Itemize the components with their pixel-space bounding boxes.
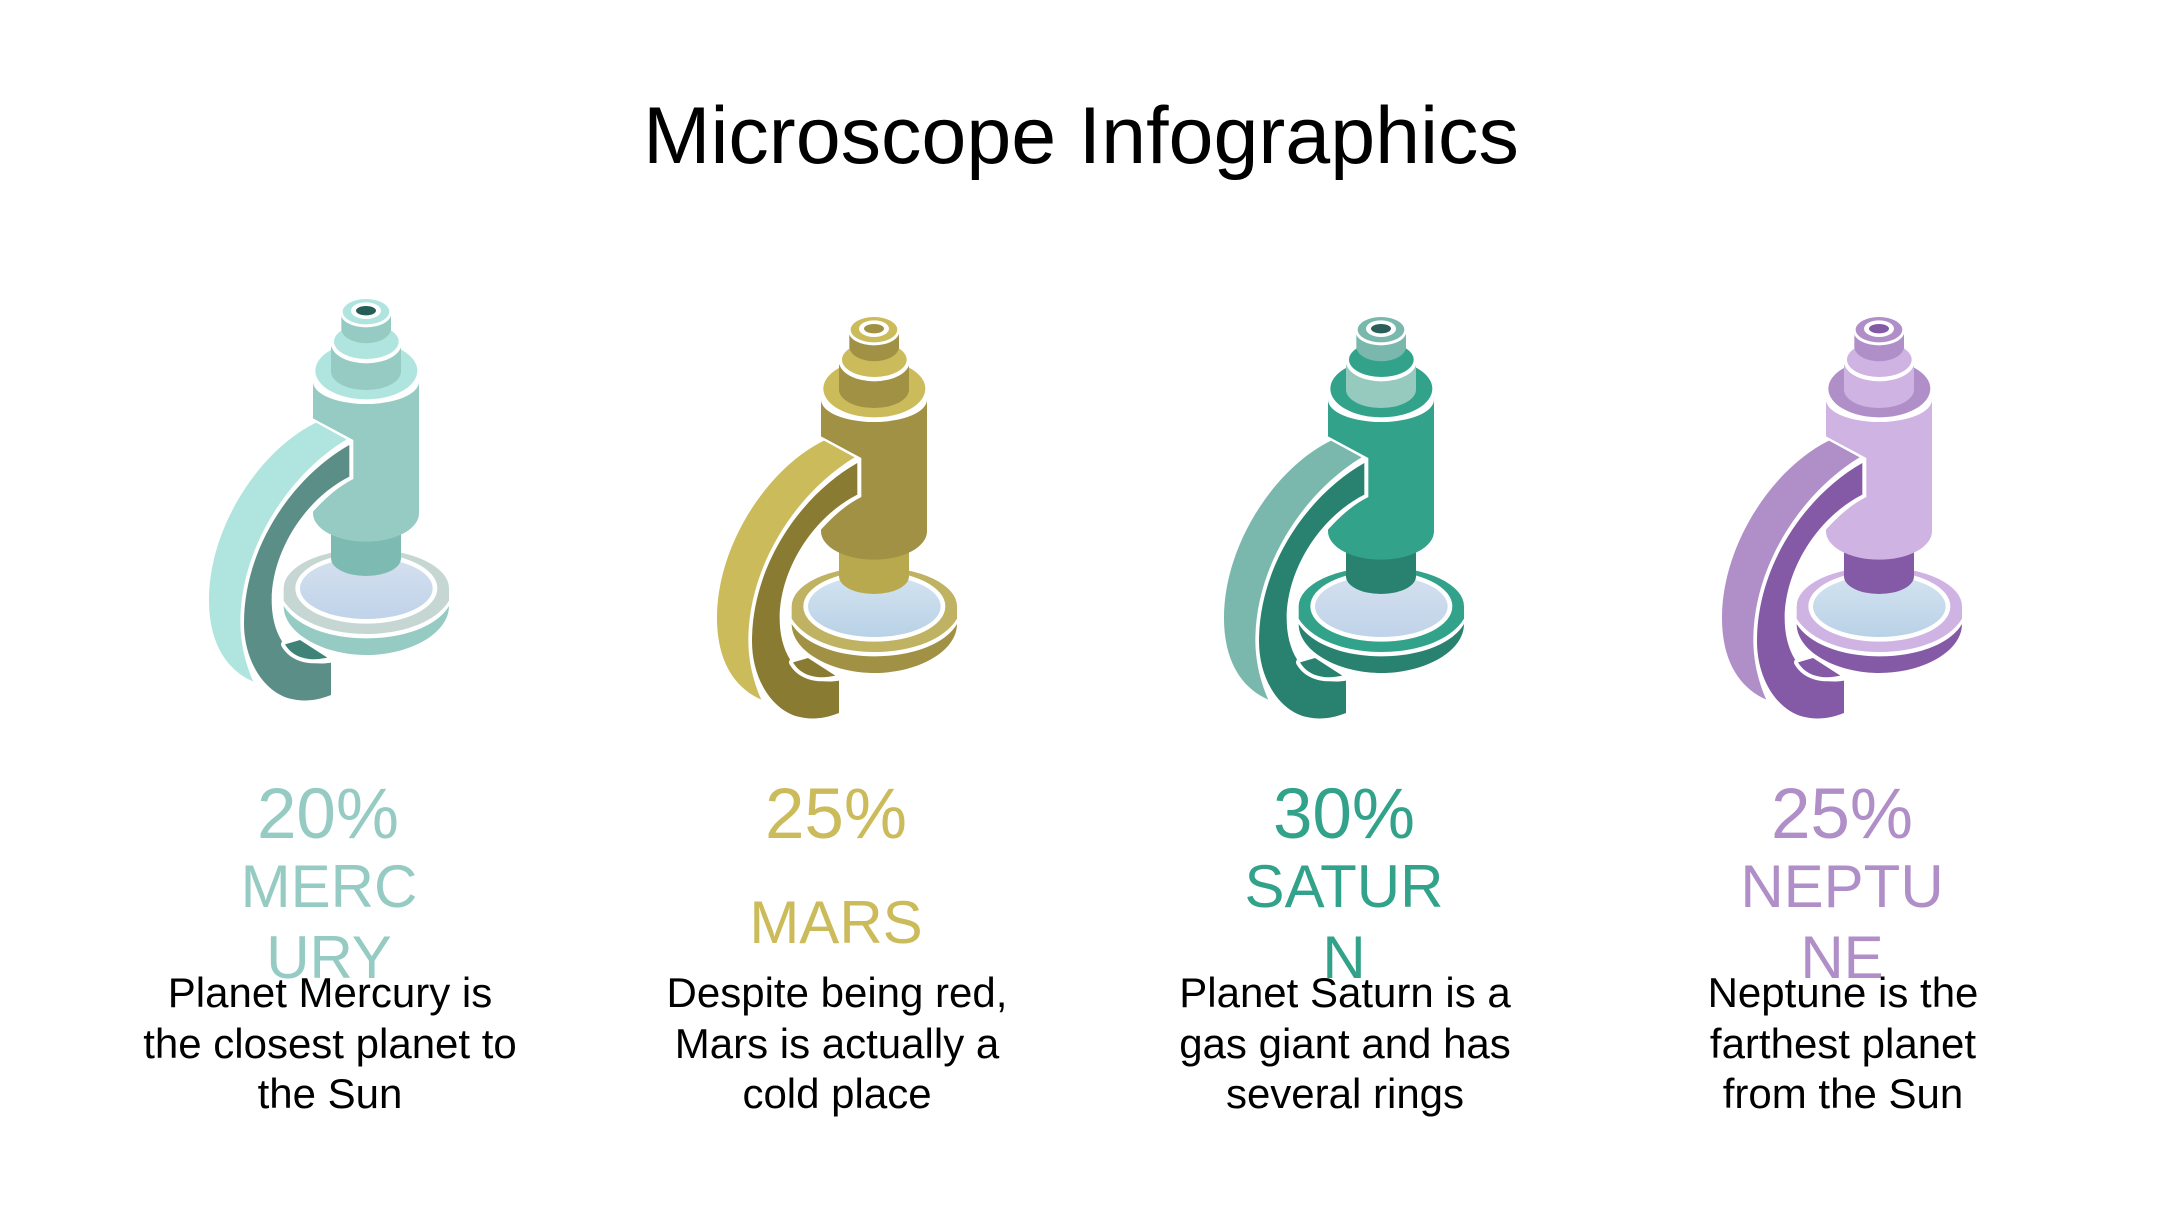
description: Mercury: the Sun xyxy=(258,1070,402,1117)
eyepiece xyxy=(1826,317,1933,422)
base xyxy=(792,567,957,673)
percentage: Neptune: 25% xyxy=(1771,775,1913,854)
microscope: Neptune xyxy=(1722,317,1962,718)
description: Mars: cold place xyxy=(742,1070,932,1117)
description: Mercury: Planet Mercury is xyxy=(168,969,492,1016)
objective xyxy=(839,548,909,594)
planet name: Neptune: NE xyxy=(1800,924,1884,991)
planet name: Mars: MARS xyxy=(749,889,923,956)
description: Neptune: Neptune is the xyxy=(1708,969,1978,1016)
planet name: Mercury: URY xyxy=(266,924,392,991)
description: Mercury: the closest planet to xyxy=(143,1020,517,1067)
planet name: Saturn: N xyxy=(1322,924,1366,991)
description: Saturn: several rings xyxy=(1226,1070,1464,1117)
body tube xyxy=(313,382,419,542)
planet name: Mercury: MERC xyxy=(241,853,417,920)
description: Mars: Mars is actually a xyxy=(675,1020,1000,1067)
microscope: Saturn xyxy=(1224,317,1464,718)
title: Microscope Infographics xyxy=(643,91,1519,181)
description: Saturn: gas giant and has xyxy=(1179,1020,1511,1067)
arm xyxy=(1722,441,1862,718)
objective xyxy=(1346,548,1416,594)
arm xyxy=(717,441,857,718)
objective xyxy=(1844,548,1914,594)
body tube xyxy=(821,400,927,560)
percentage: Saturn: 30% xyxy=(1273,775,1415,854)
arm xyxy=(209,423,349,700)
description: Neptune: farthest planet xyxy=(1710,1020,1976,1067)
percentage: Mercury: 20% xyxy=(257,775,399,854)
description: Saturn: Planet Saturn is a xyxy=(1179,969,1511,1016)
description: Mars: Despite being red, xyxy=(667,969,1007,1016)
base xyxy=(1797,567,1962,673)
body tube xyxy=(1826,400,1932,560)
microscope: Mars xyxy=(717,317,957,718)
microscope: Mercury xyxy=(209,299,449,700)
eyepiece xyxy=(821,317,928,422)
base xyxy=(1299,567,1464,673)
base xyxy=(284,549,449,655)
planet name: Saturn: SATUR xyxy=(1245,853,1443,920)
objective xyxy=(331,530,401,576)
percentage: Mars: 25% xyxy=(765,775,907,854)
body tube xyxy=(1328,400,1434,560)
description: Neptune: from the Sun xyxy=(1723,1070,1963,1117)
arm xyxy=(1224,441,1364,718)
eyepiece xyxy=(313,299,420,404)
planet name: Neptune: NEPTU xyxy=(1740,853,1944,920)
eyepiece xyxy=(1328,317,1435,422)
